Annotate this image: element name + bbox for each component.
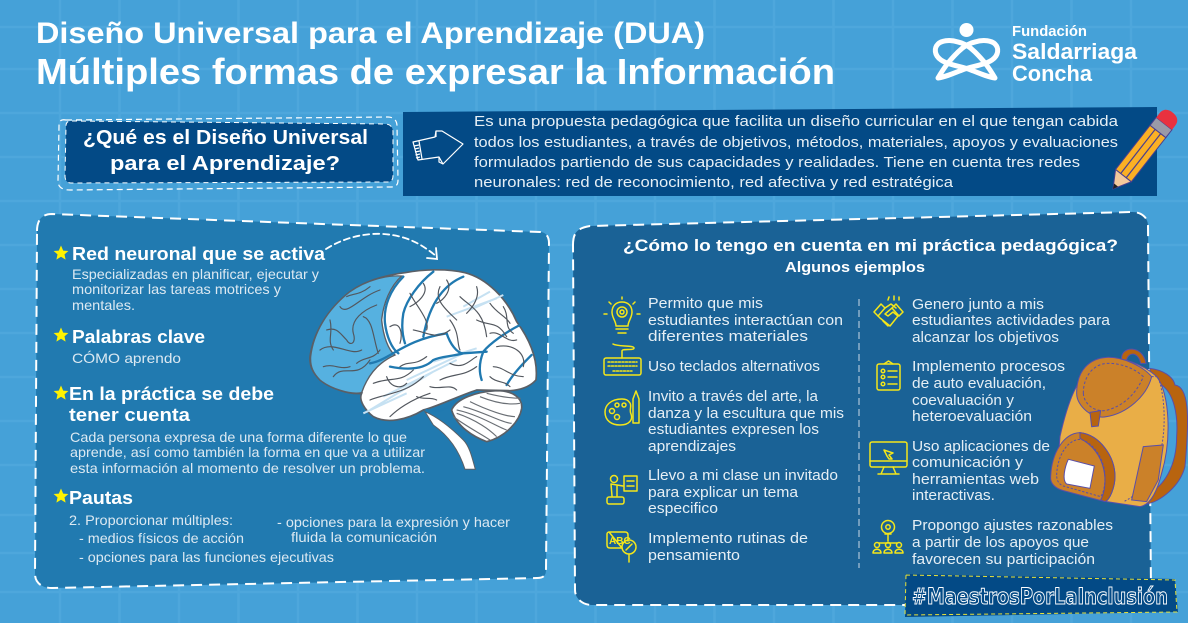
- item: materiales: estudiantes interactúan con: [648, 312, 843, 329]
- item: actividades: [874, 296, 1111, 346]
- item: arte: Invito a través del arte, la: [648, 388, 819, 405]
- item: aplicaciones: interactivas.: [912, 487, 995, 504]
- item: rutinas: [607, 530, 808, 564]
- item: invitado: especifico: [648, 500, 718, 517]
- item: invitado: para explicar un tema: [648, 484, 799, 501]
- icon: checklist: [877, 361, 900, 390]
- icon: pencil: [1105, 106, 1181, 195]
- arrow: curved dashed: [326, 234, 437, 259]
- item: invitado: [607, 467, 838, 517]
- panel: definición: neuronales: red de reconocimiento, red afectiva y red estratégica: [474, 174, 954, 191]
- item: arte: danza y la escultura que mis: [648, 405, 844, 422]
- panel: definición: [403, 107, 1157, 196]
- text: en la práctica: esta información al momento de resolver un problema.: [70, 460, 425, 476]
- callout: ¿Qué es el Diseño Universal?: [58, 117, 398, 190]
- heading: palabras clave: Palabras clave: [72, 327, 205, 347]
- icon: keyboard: [604, 344, 641, 375]
- panel: definición: formulados partiendo de sus capacidades y realidades. Tiene en cuenta tres redes: [474, 154, 1080, 171]
- item: ajustes: Propongo ajustes razonables: [912, 517, 1113, 534]
- text: en la práctica: aprende, así como también la forma en que va a utilizar: [70, 444, 425, 460]
- item: materiales: Permito que mis: [648, 295, 763, 312]
- text: cómo aprendo: CÓMO aprendo: [72, 350, 181, 366]
- item: arte: aprendizajes: [648, 438, 736, 455]
- text: pautas: - medios físicos de acción: [79, 530, 244, 546]
- text: pautas columna 2: fluida la comunicación: [291, 529, 437, 545]
- text: en la práctica: Cada persona expresa de una forma diferente lo que: [70, 429, 407, 445]
- panel: cómo lo tengo en cuenta: [573, 212, 1151, 605]
- panel: red neuronal: [35, 214, 549, 588]
- item: invitado: Llevo a mi clase un invitado: [648, 467, 838, 484]
- item: ajustes: [873, 517, 1113, 568]
- illustration: backpack: [1051, 349, 1188, 507]
- logo: Fundación Saldarriaga Concha: [935, 23, 1138, 86]
- logo: Fundación Saldarriaga Concha: Saldarriaga: [1012, 39, 1138, 64]
- item: materiales: [604, 295, 843, 345]
- heading: en la práctica: [54, 384, 274, 425]
- item: actividades: Genero junto a mis: [912, 296, 1044, 313]
- item: aplicaciones: [870, 438, 1050, 504]
- item: rutinas: Implemento rutinas de: [648, 530, 808, 547]
- title: [36, 17, 835, 92]
- item: aplicaciones: Uso aplicaciones de: [912, 438, 1050, 455]
- logo: Fundación Saldarriaga Concha: Concha: [1012, 61, 1093, 86]
- heading: red neuronal: Red neuronal que se activa: [72, 244, 326, 264]
- item: teclados: Uso teclados alternativos: [648, 358, 820, 375]
- item: evaluación: [877, 358, 1065, 425]
- icon: arrow: [413, 131, 463, 164]
- heading: panel derecho: [623, 237, 1118, 276]
- icon: palette and brush: [605, 391, 639, 425]
- item: actividades: alcanzar los objetivos: [912, 329, 1059, 346]
- panel: definición: Es una propuesta pedagógica que facilita un diseño curricular en el que tengan cabida: [474, 113, 1119, 130]
- item: teclados: [604, 344, 820, 375]
- item: evaluación: de auto evaluación,: [912, 375, 1046, 392]
- title: Múltiples formas de expresar la Información: [36, 51, 835, 92]
- icon: speaker at board: [607, 476, 637, 504]
- callout: ¿Qué es el Diseño Universal?: ¿Qué es el Diseño Universal: [83, 127, 368, 149]
- hashtag badge: [905, 574, 1178, 617]
- icon: monitor: [870, 442, 907, 474]
- icon: bulb and people: [873, 520, 903, 553]
- icon: ABC magnifier: ABC: [609, 536, 631, 547]
- icon: handshake: [874, 296, 903, 326]
- text: red neuronal: mentales.: [72, 297, 135, 313]
- illustration: brain: [310, 270, 536, 469]
- text: pautas: - opciones para las funciones ejecutivas: [79, 549, 334, 565]
- item: aplicaciones: herramientas web: [912, 471, 1039, 488]
- icon: ABC magnifier: [607, 532, 636, 562]
- item: aplicaciones: comunicación y: [912, 454, 1024, 471]
- item: evaluación: Implemento procesos: [912, 358, 1065, 375]
- panel: definición: todos los estudiantes, a través de objetivos, métodos, materiales, apoyos y evaluaciones: [474, 134, 1118, 151]
- heading: en la práctica: tener cuenta: [69, 405, 191, 425]
- title: Diseño Universal para el Aprendizaje (DUA): [36, 17, 705, 50]
- heading: panel derecho: ¿Cómo lo tengo en cuenta en mi práctica pedagógica?: [623, 237, 1118, 255]
- text: red neuronal: monitorizar las tareas motrices y: [72, 281, 281, 297]
- logo: Fundación Saldarriaga Concha: Fundación: [1012, 23, 1087, 40]
- item: ajustes: favorecen su participación: [912, 551, 1095, 568]
- item: evaluación: coevaluación y: [912, 392, 1015, 409]
- item: rutinas: pensamiento: [648, 547, 740, 564]
- heading: pautas: Pautas: [69, 488, 133, 508]
- item: arte: [605, 388, 844, 455]
- text: red neuronal: Especializadas en planificar, ejecutar y: [72, 266, 319, 282]
- icon: bulb gear: [604, 297, 640, 333]
- item: ajustes: a partir de los apoyos que: [912, 534, 1089, 551]
- heading: en la práctica: En la práctica se debe: [69, 384, 274, 404]
- heading: panel derecho: Algunos ejemplos: [785, 260, 925, 276]
- item: evaluación: heteroevaluación: [912, 408, 1032, 425]
- item: arte: estudiantes expresen los: [648, 421, 819, 438]
- text: pautas: 2. Proporcionar múltiples:: [69, 512, 233, 528]
- item: actividades: estudiantes actividades para: [912, 312, 1111, 329]
- text: pautas columna 2: - opciones para la expresión y hacer: [277, 514, 510, 530]
- callout: ¿Qué es el Diseño Universal?: para el Aprendizaje?: [110, 153, 340, 175]
- item: materiales: diferentes materiales: [648, 328, 808, 345]
